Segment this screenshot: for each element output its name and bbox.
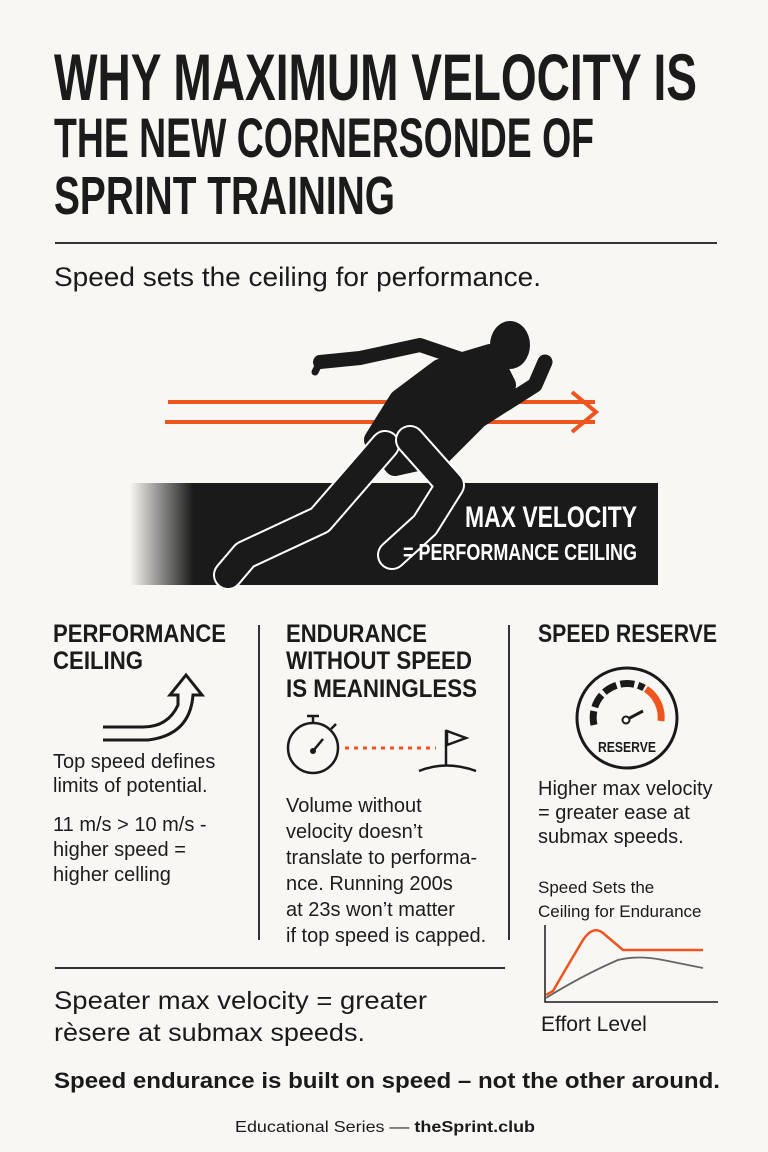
heading: PERFORMANCE (53, 620, 226, 648)
text (286, 795, 486, 947)
text: velocity doesn’t (286, 821, 423, 843)
hero illustration: runner (132, 321, 658, 590)
text: if top speed is capped. (286, 925, 486, 947)
text: Volume without (286, 795, 422, 817)
panel: speed reserve: Effort Level (541, 1013, 647, 1036)
summary text (54, 987, 427, 1047)
heading: ENDURANCE (286, 620, 427, 648)
text: nce. Running 200s (286, 873, 453, 895)
panel: speed reserve (538, 620, 718, 1036)
title (54, 40, 697, 226)
heading: IS MEANINGLESS (286, 675, 477, 703)
panel: performance ceiling: higher celling (53, 864, 171, 886)
text: submax speeds. (538, 826, 684, 848)
panel: performance ceiling (53, 620, 226, 886)
hero illustration: runner: = PERFORMANCE CEILING (403, 539, 637, 565)
chart: speed sets ceiling: Ceiling for Endurance (538, 902, 701, 921)
band text: MAX VELOCITY (465, 501, 637, 534)
icon: gauge (576, 666, 678, 770)
text: Higher max velocity (538, 778, 713, 800)
title: SPRINT TRAINING (54, 166, 395, 226)
text: Top speed defines (53, 751, 215, 773)
text: = greater ease at (538, 802, 690, 824)
heading (53, 620, 226, 675)
panel: performance ceiling: higher speed = (53, 839, 186, 861)
chart: speed sets ceiling: Speed Sets the (538, 878, 654, 897)
heading: CEILING (53, 647, 143, 675)
summary text: Speater max velocity = greater (54, 987, 427, 1015)
icon: gauge: RESERVE (598, 739, 656, 756)
orange speed arrows (165, 392, 596, 432)
icon: stopwatch to flag (286, 714, 476, 774)
text (53, 751, 215, 797)
heading (286, 620, 477, 703)
text: limits of potential. (53, 775, 208, 797)
panel: performance ceiling: 11 m/s > 10 m/s - (53, 814, 207, 836)
bold takeaway: Speed endurance is built on speed – not the other around. (54, 1068, 720, 1093)
chart: speed sets ceiling (538, 878, 701, 921)
subtitle: Speed sets the ceiling for performance. (54, 262, 541, 292)
text: translate to performa- (286, 847, 477, 869)
black band (130, 483, 658, 585)
heading: WITHOUT SPEED (286, 647, 472, 675)
runner silhouette (228, 321, 545, 575)
icon: curved up arrow (103, 672, 205, 742)
summary text: rèsere at submax speeds. (54, 1019, 365, 1047)
footer: Educational Series –– theSprint.club (235, 1119, 535, 1136)
text (538, 778, 713, 848)
text: at 23s won’t matter (286, 899, 455, 921)
panel: endurance without speed (286, 620, 486, 947)
